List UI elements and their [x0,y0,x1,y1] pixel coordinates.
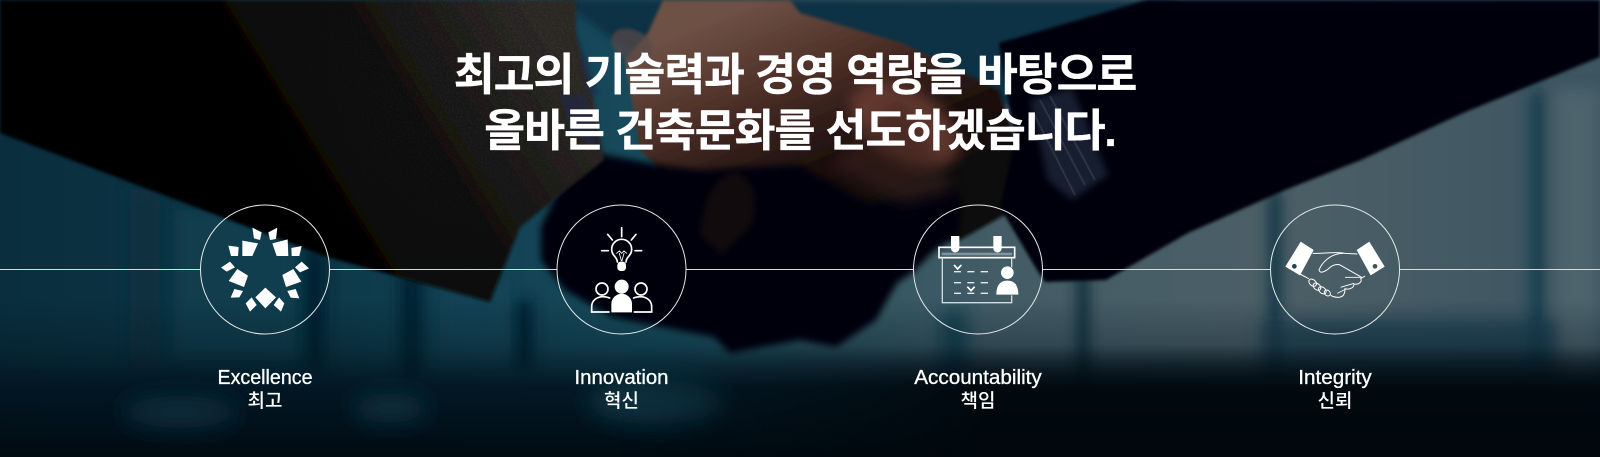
value: Accountability [914,205,1042,412]
value: Integrity [1270,205,1400,412]
right sleeve [999,0,1600,282]
label: Excellence: 최고 [248,390,282,412]
label: Integrity: Integrity [1298,367,1372,389]
value: Excellence [200,205,330,412]
title [454,51,1136,156]
label: Excellence: Excellence [218,367,312,389]
label: Excellence [218,367,312,412]
title: 올바른 건축문화를 선도하겠습니다. [484,107,1116,156]
icon: lightbulb and people [557,205,686,334]
timeline line [0,268,1600,270]
label: Innovation: Innovation [574,367,668,389]
label: Integrity [1298,367,1372,412]
title: 최고의 기술력과 경영 역량을 바탕으로 [454,51,1136,100]
lower dark hand [541,100,962,353]
left sleeve [0,0,620,310]
label: Innovation: 혁신 [604,390,639,412]
icon: Excellence star [200,205,330,334]
value: Innovation [557,205,686,412]
upper hand [625,0,1040,240]
label: Accountability: 책임 [961,390,995,412]
label: Accountability [914,367,1042,412]
label: Innovation [574,367,668,412]
label: Accountability: Accountability [914,367,1042,389]
icon: handshake [1270,205,1400,334]
label: Integrity: 신뢰 [1318,390,1352,412]
top teal gap [560,0,1180,110]
icon: calendar with person [914,205,1042,334]
